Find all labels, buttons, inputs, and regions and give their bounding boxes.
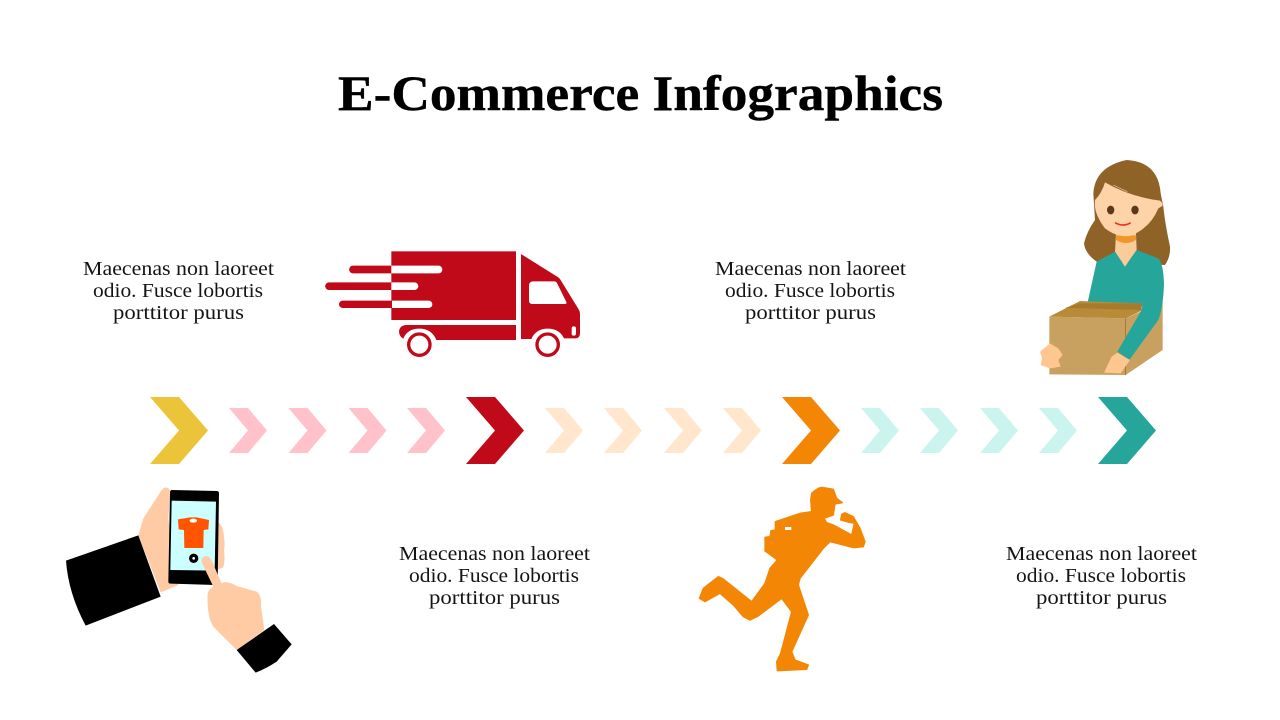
phone screen xyxy=(170,501,216,571)
text block: top middle: porttitor purus xyxy=(745,303,876,324)
text block: top left: Maecenas non laoreet xyxy=(83,259,275,280)
chevron: teal step xyxy=(1098,397,1156,464)
text block: bottom left xyxy=(399,544,591,609)
chevron: yellow step xyxy=(150,397,208,464)
left hand xyxy=(138,487,178,592)
chevron: orange step xyxy=(782,397,840,464)
shirt xyxy=(178,517,209,548)
left sleeve xyxy=(66,535,161,626)
text block: bottom right: odio. Fusce lobortis xyxy=(1016,566,1186,587)
chevrons: mint connectors xyxy=(861,408,1077,453)
text block: top left: porttitor purus xyxy=(113,303,244,324)
chevron: red step xyxy=(466,397,524,464)
phone xyxy=(168,490,219,585)
text block: top middle xyxy=(715,259,907,324)
text block: bottom right: porttitor purus xyxy=(1036,588,1167,609)
chevrons: pink connectors xyxy=(229,408,445,453)
text block: top left xyxy=(83,259,275,324)
text block: top middle: Maecenas non laoreet xyxy=(715,259,907,280)
icon: running courier xyxy=(699,487,865,671)
text block: top middle: odio. Fusce lobortis xyxy=(725,281,895,302)
right cuff xyxy=(237,624,292,673)
text block: bottom right: Maecenas non laoreet xyxy=(1006,544,1198,565)
text block: bottom left: porttitor purus xyxy=(429,588,560,609)
chevron timeline xyxy=(150,397,1156,464)
icon: woman holding box xyxy=(1040,160,1170,375)
text block: bottom right xyxy=(1006,544,1198,609)
text block: top left: odio. Fusce lobortis xyxy=(93,281,263,302)
chevrons: cream connectors xyxy=(545,408,761,453)
title: E-Commerce Infographics xyxy=(338,65,943,121)
icon: delivery truck xyxy=(325,251,580,355)
text block: bottom left: odio. Fusce lobortis xyxy=(409,566,579,587)
icon: hands with smartphone xyxy=(66,487,292,673)
right hand xyxy=(201,556,264,650)
text block: bottom left: Maecenas non laoreet xyxy=(399,544,591,565)
